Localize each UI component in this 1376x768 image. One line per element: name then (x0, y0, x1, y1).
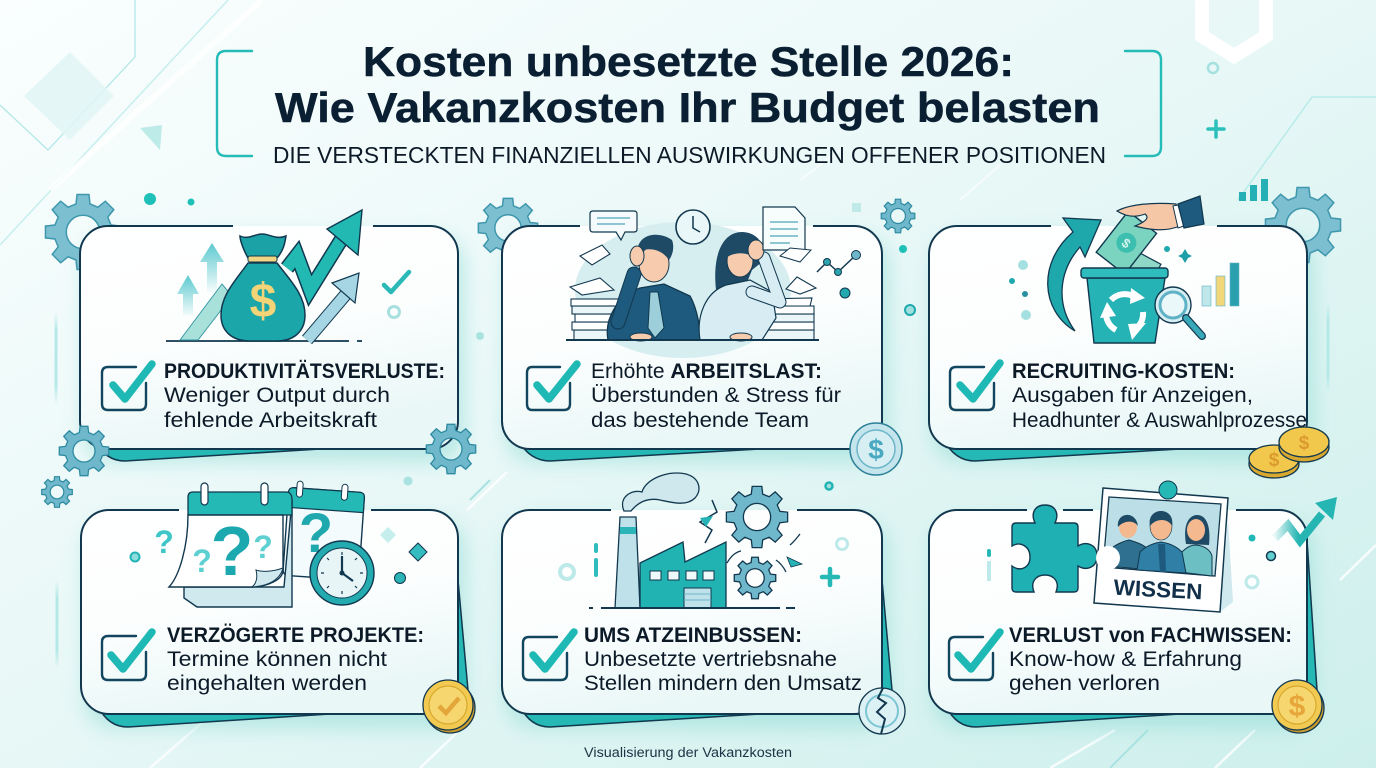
icon: money bag with arrows (166, 210, 362, 341)
text block (167, 624, 424, 695)
icon: background gear (45, 194, 121, 270)
decorative dots and sparkle (1009, 246, 1192, 320)
text block: PRODUKTIVITÄTSVERLUSTE: (164, 360, 445, 383)
text block: Erhöhte ARBEITSLAST: (591, 359, 822, 383)
icon: calendars and clock: ? (299, 501, 333, 564)
icon: calendars and clock: ? (211, 512, 253, 590)
card body (929, 510, 1307, 714)
card body (502, 226, 882, 449)
subtitle: DIE VERSTECKTEN FINANZIELLEN AUSWIRKUNGEN OFFENER POSITIONEN (273, 142, 1106, 168)
icon: line chart (817, 250, 860, 298)
icon: gold coins: $ (1269, 450, 1280, 471)
card body (81, 510, 458, 714)
back calendar (283, 480, 365, 580)
panel: Umsatzeinbußen (502, 473, 905, 734)
text block: eingehalten werden (167, 671, 367, 695)
people (1107, 540, 1152, 570)
panel: Erhöhte Arbeitslast (478, 198, 902, 475)
text block: Know-how & Erfahrung (1009, 647, 1242, 671)
panel: Produktivitätsverluste (45, 194, 458, 461)
main calendar (184, 500, 292, 607)
icon: checkbox (102, 364, 152, 410)
card shadows (84, 236, 1313, 728)
text block: Termine können nicht (167, 647, 387, 671)
title (275, 38, 1100, 131)
text block: Stellen mindern den Umsatz (584, 671, 862, 695)
icon: gold coins: $ (1299, 433, 1310, 454)
title block (217, 38, 1161, 168)
icon: team photo (1094, 481, 1233, 612)
icon: rising arrow (1275, 497, 1337, 541)
icon: blue coin (850, 423, 902, 475)
card body (929, 226, 1307, 449)
text block: Überstunden & Stress für (591, 383, 841, 407)
text block (591, 359, 841, 432)
paper stacks (570, 245, 816, 340)
decorative shapes (987, 534, 1276, 588)
decorative shapes (560, 538, 848, 585)
icon: checkbox (527, 364, 577, 410)
text block (584, 624, 862, 695)
text block: VERZÖGERTE PROJEKTE: (167, 624, 424, 647)
icon: stressed coworkers (566, 207, 819, 358)
title: Kosten unbesetzte Stelle 2026: (363, 38, 1014, 85)
icon: calendars and clock: ? (154, 524, 174, 560)
icon: bin with cash and magnifier (1081, 211, 1202, 343)
card back sheet (98, 580, 468, 727)
card body (80, 226, 458, 449)
card back sheet (95, 440, 320, 461)
text block: Headhunter & Auswahlprozesse (1012, 408, 1307, 432)
icon: hand (1117, 196, 1204, 230)
icon: gold coin with dollar: $ (1289, 690, 1306, 723)
text block (164, 360, 445, 432)
icon: background gear (478, 198, 538, 258)
icon: gold coins (1249, 427, 1329, 478)
icon: gears around card one (42, 424, 476, 507)
recycling arrows (1106, 294, 1143, 331)
icon: money bag with arrows: $ (250, 275, 277, 328)
panel: Recruiting-Kosten (929, 187, 1341, 478)
text block: fehlende Arbeitskraft (164, 408, 377, 432)
icon: calendars and clock: ? (192, 543, 212, 579)
card back sheet (946, 540, 1317, 727)
card back sheet (520, 580, 892, 727)
card back sheet (518, 440, 760, 461)
icon: gold coin with check (423, 680, 475, 733)
icon: curved arrow (1048, 218, 1101, 331)
clock (310, 541, 374, 605)
pin (1159, 481, 1177, 499)
decorative dots (54, 193, 412, 486)
icon: blue coin: $ (868, 434, 884, 465)
title bracket (217, 51, 1161, 156)
text block (1009, 624, 1292, 695)
man (607, 284, 701, 340)
icon: checkbox (523, 632, 574, 680)
icon: factory with smoke (589, 473, 795, 608)
icon: cracked coin (859, 688, 905, 734)
text block: VERLUST von FACHWISSEN: (1009, 624, 1292, 647)
panel: Verlust von Fachwissen (929, 481, 1337, 733)
icon: checkbox (949, 632, 1000, 680)
icon: bin with cash and magnifier: $ (1119, 235, 1134, 252)
speech bubble (590, 211, 637, 240)
decorative shapes (130, 527, 427, 584)
icon: bar chart inside card (1202, 263, 1239, 306)
panel: Verzögerte Projekte (81, 480, 475, 733)
text block: Weniger Output durch (164, 383, 390, 407)
icon: calendars and clock: ? (253, 529, 273, 565)
text block: Unbesetzte vertriebsnahe (584, 647, 837, 671)
text block: gehen verloren (1009, 671, 1160, 695)
icon: small gear and dots (476, 199, 915, 340)
icon: background gear (1265, 187, 1341, 263)
clock (676, 210, 710, 244)
text block (1012, 360, 1307, 432)
card body (502, 510, 882, 714)
woman (715, 232, 764, 296)
text block: RECRUITING-KOSTEN: (1012, 360, 1235, 383)
icon: calendars and clock (154, 480, 374, 607)
footer caption: Visualisierung der Vakanzkosten (584, 745, 792, 760)
icon: puzzle piece (1012, 505, 1097, 592)
icon: checkbox (102, 632, 152, 680)
icon: small check and ring (384, 272, 409, 318)
text block: das bestehende Team (591, 408, 809, 432)
document (763, 207, 805, 250)
missing puzzle slot (1096, 546, 1120, 570)
icon: gold coin with dollar (1272, 680, 1324, 733)
icon: broken gears (700, 486, 802, 599)
text block: Ausgaben für Anzeigen, (1012, 383, 1253, 407)
label: WISSEN (1113, 575, 1203, 604)
icon: checkbox (950, 363, 1000, 410)
title: Wie Vakanzkosten Ihr Budget belasten (275, 84, 1100, 131)
icon: mini bar chart top right (1239, 179, 1268, 201)
text block: UMS ATZEINBUSSEN: (584, 624, 802, 647)
card back sheet (944, 440, 1180, 461)
